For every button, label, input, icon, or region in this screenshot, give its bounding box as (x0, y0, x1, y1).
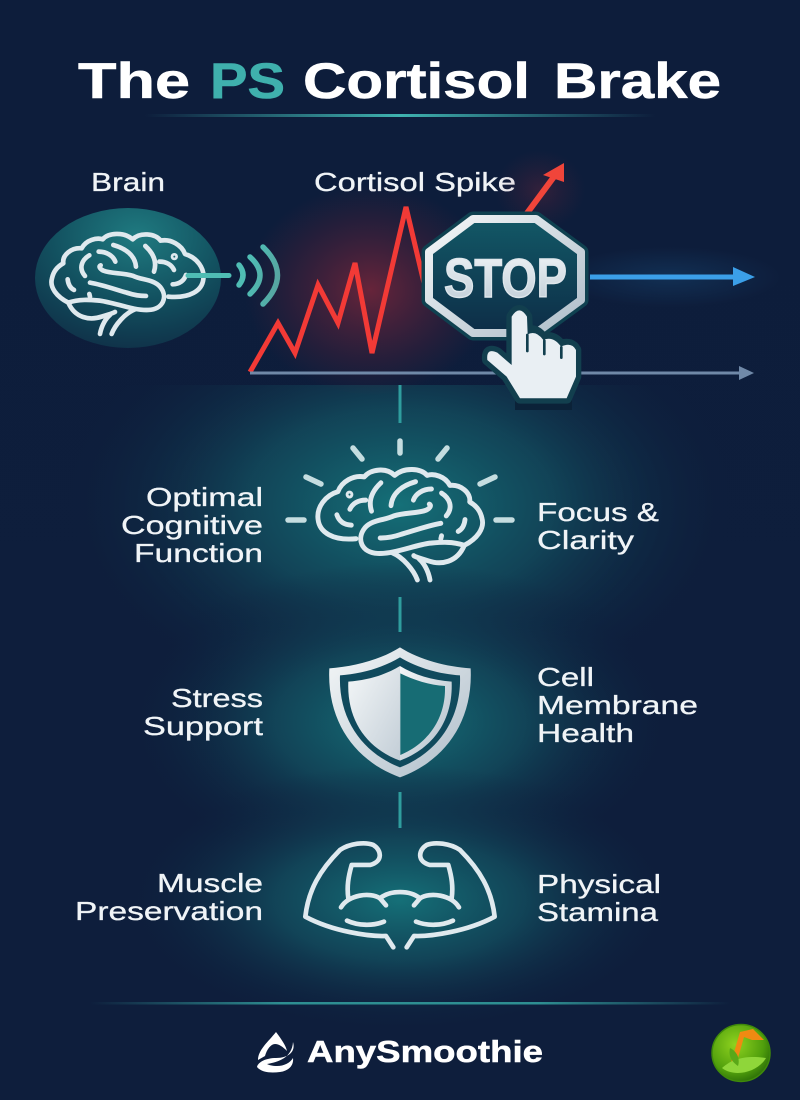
text: stress support (143, 683, 264, 741)
text: muscle preservation (75, 868, 263, 926)
chart: cortisol spike (245, 150, 585, 395)
text: optimal cognitive function (121, 482, 263, 568)
text: stress support: Stress (171, 683, 263, 713)
icon: anysmoothie drop logo (257, 1032, 294, 1072)
icon: pointing hand (487, 310, 576, 410)
icon: green badge (712, 1024, 770, 1082)
title: The (78, 53, 190, 109)
icon: stop sign (429, 219, 581, 333)
arrow: flat baseline axis (250, 366, 754, 380)
connector: shield to muscle (398, 792, 402, 828)
background glow: lower column (143, 385, 657, 1000)
arrow: blue flat line (560, 247, 780, 307)
text: cell membrane health: Cell (537, 662, 594, 692)
logo text: anysmoothie: AnySmoothie (307, 1034, 543, 1069)
text: physical stamina: Physical (537, 869, 661, 899)
title (78, 53, 721, 109)
text: cell membrane health: Health (537, 718, 634, 748)
title: Cortisol (303, 53, 530, 109)
icon: brain in teal oval with signal (35, 208, 278, 348)
text: focus and clarity: Focus & (537, 497, 659, 527)
icon: glowing brain (288, 441, 512, 580)
label: cortisol spike: Cortisol Spike (314, 167, 516, 197)
text: focus and clarity (537, 497, 659, 555)
text: optimal cognitive function: Function (134, 538, 263, 568)
text: focus and clarity: Clarity (537, 525, 634, 555)
icon: shield (329, 647, 471, 777)
text: cell membrane health (537, 662, 698, 748)
text: cell membrane health: Membrane (537, 690, 698, 720)
text: stress support: Support (143, 711, 264, 741)
title: PS (210, 53, 285, 109)
title: Brake (554, 53, 721, 109)
label: brain: Brain (91, 167, 165, 197)
title underline (145, 114, 655, 117)
icon: flexing muscle torso (305, 843, 495, 947)
text: physical stamina (537, 869, 661, 927)
text: optimal cognitive function: Optimal (146, 482, 263, 512)
connector: brain to shield (398, 597, 402, 632)
text: muscle preservation: Preservation (75, 896, 263, 926)
text: optimal cognitive function: Cognitive (121, 510, 263, 540)
icon: stop sign: STOP (444, 247, 567, 309)
text: physical stamina: Stamina (537, 897, 659, 927)
connector: stop to brain (398, 385, 402, 423)
footer divider (90, 1002, 730, 1004)
text: muscle preservation: Muscle (157, 868, 263, 898)
